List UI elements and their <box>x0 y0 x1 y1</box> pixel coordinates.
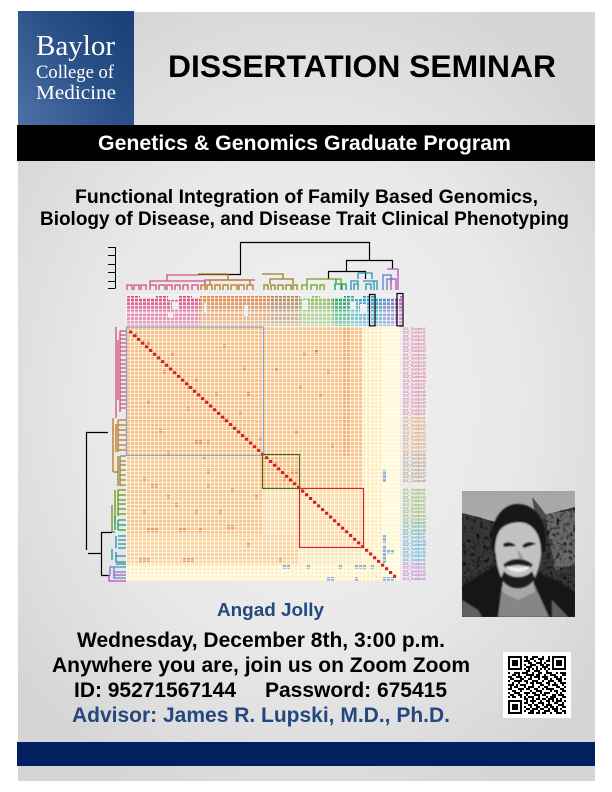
seminar title: Biology of Disease, and Disease Trait Clinical Phenotyping <box>40 208 569 230</box>
row labels: ID1_Subject5 <box>403 453 426 457</box>
row labels: ID1_Subject1 <box>403 408 426 412</box>
row labels: ID2_Subject6 <box>403 375 426 379</box>
row labels: ID1_Subject1 <box>403 416 426 420</box>
dendrogram scale <box>108 247 116 288</box>
row labels: ID1_Subject3 <box>403 506 426 510</box>
row labels: ID1_Subject1 <box>403 562 426 566</box>
row labels: ID1_Subject4 <box>403 514 426 518</box>
row labels: ID1_Subject7 <box>403 532 426 536</box>
row labels: ID2_Subject2 <box>403 499 426 503</box>
row labels: ID1_Subject4 <box>403 442 426 446</box>
row labels: ID2_Subject2 <box>403 427 426 431</box>
portrait photo <box>462 491 575 617</box>
row labels: ID2_Subject8 <box>403 543 426 547</box>
heatmap matrix <box>126 326 400 581</box>
program banner: Genetics & Genomics Graduate Program <box>98 131 511 155</box>
highlighted columns <box>370 294 403 326</box>
row labels: ID2_Subject1 <box>403 492 426 496</box>
row labels: ID2_Subject7 <box>403 536 426 540</box>
correlation heatmap with dendrograms <box>86 242 426 581</box>
row labels: ID2_Subject4 <box>403 446 426 450</box>
row labels: ID1_Subject2 <box>403 423 426 427</box>
row labels: ID1_Subject8 <box>403 539 426 543</box>
row labels: ID2_Subject6 <box>403 464 426 468</box>
row labels: ID1_Subject2 <box>403 334 426 338</box>
row labels: ID2_Subject4 <box>403 518 426 522</box>
row labels: ID3_Subject1 <box>403 431 426 435</box>
row labels <box>403 327 426 581</box>
event details <box>52 629 470 702</box>
cluster highlight boxes <box>126 327 364 548</box>
row labels: ID2_Subject5 <box>403 368 426 372</box>
row labels: ID2_Subject7 <box>403 386 426 390</box>
row labels: ID1_Subject8 <box>403 390 426 394</box>
row labels: ID1_Subject6 <box>403 460 426 464</box>
column color blocks <box>126 294 402 326</box>
row labels: ID1_Subject8 <box>403 479 426 483</box>
row labels: ID3_Subject1 <box>403 577 426 581</box>
seminar title <box>40 186 569 230</box>
row labels: ID3_Subject2 <box>403 547 426 551</box>
top dendrogram <box>127 242 398 290</box>
row labels: ID1_Subject3 <box>403 346 426 350</box>
row labels: ID2_Subject1 <box>403 331 426 335</box>
logo: Baylor College of Medicine <box>18 11 134 125</box>
row labels: ID1_Subject5 <box>403 521 426 525</box>
row labels: ID2_Subject1 <box>403 412 426 416</box>
seminar title: Functional Integration of Family Based Genomics, <box>75 186 538 208</box>
row labels: ID2_Subject3 <box>403 438 426 442</box>
row labels: ID3_Subject3 <box>403 379 426 383</box>
row labels: ID2_Subject7 <box>403 475 426 479</box>
row labels: ID2_Subject5 <box>403 525 426 529</box>
row labels: ID1_Subject1 <box>403 327 426 331</box>
row labels: ID1_Subject1 <box>403 488 426 492</box>
row labels: ID1_Subject6 <box>403 528 426 532</box>
row labels: ID1_Subject6 <box>403 371 426 375</box>
row labels: ID1_Subject2 <box>403 495 426 499</box>
event details: ID: 95271567144 <box>74 679 236 702</box>
row labels: ID1_Subject1 <box>403 558 426 562</box>
bottom navy band <box>17 742 595 766</box>
row labels: ID2_Subject5 <box>403 457 426 461</box>
row labels: ID2_Subject9 <box>403 405 426 409</box>
logo: Baylor College of Medicine: Medicine <box>36 82 116 104</box>
row labels: ID3_Subject4 <box>403 397 426 401</box>
row labels: ID2_Subject3 <box>403 349 426 353</box>
row labels: ID1_Subject7 <box>403 472 426 476</box>
event details: Wednesday, December 8th, 3:00 p.m. <box>77 629 445 652</box>
event details: Password: 675415 <box>265 679 447 702</box>
logo: Baylor College of Medicine: Baylor <box>36 30 115 62</box>
row labels: ID3_Subject1 <box>403 503 426 507</box>
row labels: ID2_Subject9 <box>403 554 426 558</box>
row labels: ID3_Subject1 <box>403 342 426 346</box>
row labels: ID1_Subject2 <box>403 569 426 573</box>
row labels: ID2_Subject1 <box>403 420 426 424</box>
left dendrogram <box>86 327 126 581</box>
row labels: ID1_Subject3 <box>403 434 426 438</box>
speaker name: Angad Jolly <box>217 599 325 620</box>
logo: Baylor College of Medicine: College of <box>36 62 115 83</box>
row labels: ID2_Subject8 <box>403 394 426 398</box>
row labels: ID2_Subject3 <box>403 510 426 514</box>
row labels: ID2_Subject1 <box>403 566 426 570</box>
row labels: ID1_Subject7 <box>403 382 426 386</box>
row labels: ID2_Subject2 <box>403 338 426 342</box>
program banner <box>17 125 595 161</box>
row labels: ID3_Subject2 <box>403 360 426 364</box>
heading: Dissertation Seminar: DISSERTATION SEMINAR <box>168 48 556 84</box>
row labels: ID1_Subject5 <box>403 364 426 368</box>
QR code <box>503 652 571 718</box>
row labels: ID2_Subject2 <box>403 573 426 577</box>
row labels: ID3_Subject2 <box>403 449 426 453</box>
advisor: Advisor: James R. Lupski, M.D., Ph.D. <box>72 704 450 727</box>
event details: Anywhere you are, join us on Zoom Zoom <box>52 654 470 677</box>
row labels: ID3_Subject3 <box>403 468 426 472</box>
row labels: ID1_Subject9 <box>403 550 426 554</box>
row labels: ID2_Subject4 <box>403 357 426 361</box>
row labels: ID1_Subject4 <box>403 353 426 357</box>
row labels: ID1_Subject9 <box>403 401 426 405</box>
